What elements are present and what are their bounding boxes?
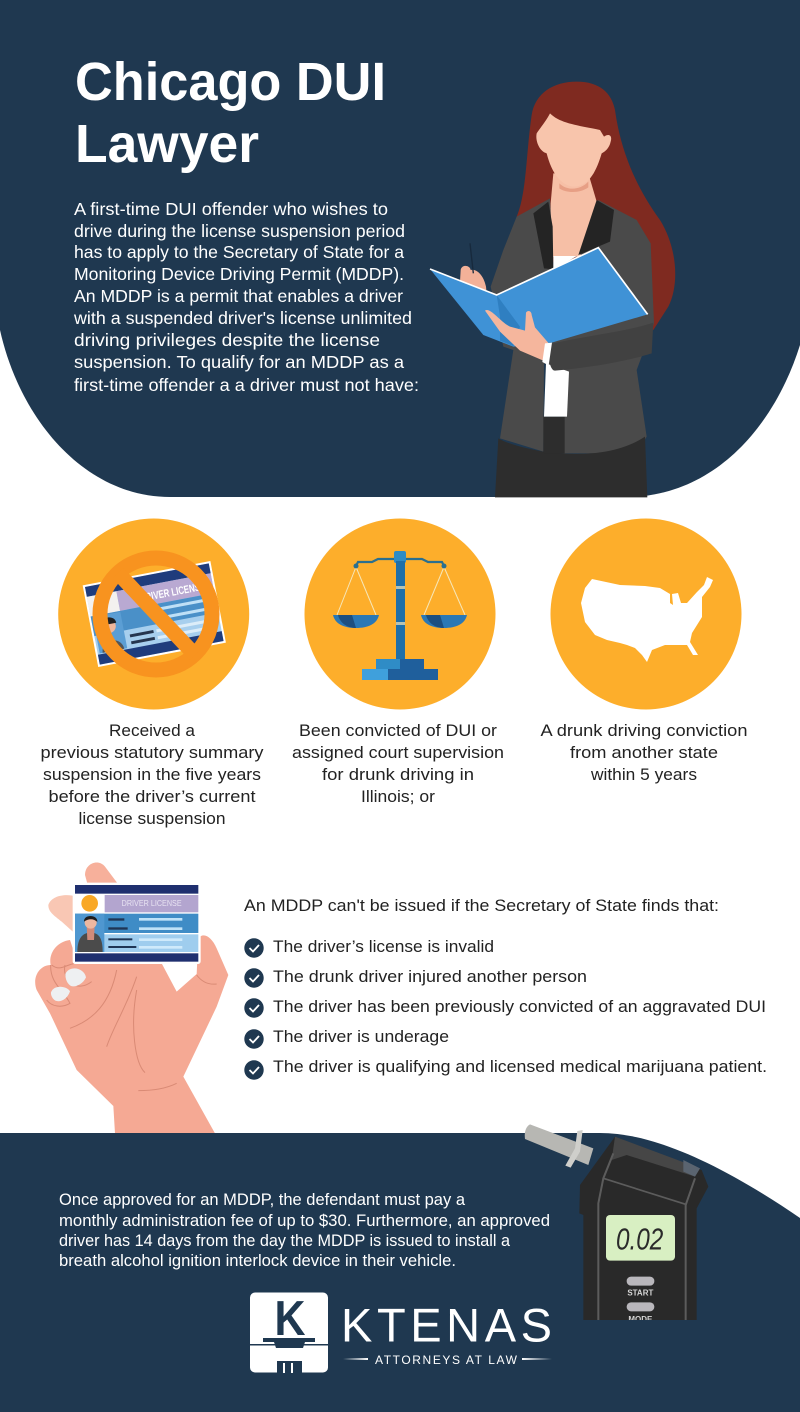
intro paragraph: has to apply to the Secretary of State for a [74,242,404,262]
caption: out-of-state conviction: A drunk driving conviction [540,722,748,740]
panel: three disqualifying conditions [40,518,748,828]
fee paragraph: Once approved for an MDDP, the defendant must pay a [59,1191,466,1209]
logo: Ktenas Attorneys at Law [250,1292,552,1373]
illustration: breathalyzer: MODE [628,1315,653,1324]
caption: previous suspension [40,722,264,828]
icon: scales of justice [304,518,496,710]
caption: previous suspension: license suspension [78,810,226,828]
intro paragraph: Monitoring Device Driving Permit (MDDP). [74,264,404,284]
illustration: woman with folder [430,82,675,497]
caption: previous suspension: Received a [109,722,196,740]
fee paragraph: driver has 14 days from the day the MDDP is issued to install a [59,1232,511,1250]
illustration: breathalyzer: START [627,1288,653,1297]
title: Lawyer [75,114,259,174]
list item: invalid license: The driver’s license is invalid [273,937,494,956]
logo wordmark: KTENAS [341,1298,552,1352]
title: Chicago DUI [75,52,386,112]
fee paragraph: monthly administration fee of up to $30. Furthermore, an approved [59,1212,550,1230]
caption: previous suspension: before the driver’s current [48,788,256,806]
caption: prior conviction: Been convicted of DUI or [299,722,498,740]
intro paragraph: with a suspended driver's license unlimited [73,308,412,328]
icon: map of the United States [550,518,742,710]
icon: prohibited driver license: DRIVER LICENSE [139,581,206,605]
caption: previous suspension: suspension in the five years [43,766,261,784]
illustration: hand holding driver license: DRIVER LICENSE [122,899,182,908]
intro paragraph: An MDDP is a permit that enables a driver [74,286,403,306]
icon: prohibited driver license [58,518,249,710]
text block: MDDP denial conditions [244,896,767,1080]
caption: prior conviction: for drunk driving in [322,766,474,784]
intro paragraph: driving privileges despite the license [74,330,380,350]
caption: prior conviction [292,722,504,806]
fee paragraph [59,1191,550,1270]
logo tagline: ATTORNEYS AT LAW [375,1353,518,1367]
illustration: hand holding driver license [35,863,228,1133]
list heading: An MDDP can't be issued if the Secretary of State finds that: [244,896,719,915]
list item: injured person: The drunk driver injured another person [273,967,587,986]
caption: prior conviction: assigned court supervision [292,744,504,762]
caption: out-of-state conviction [540,722,748,784]
logo icon: K [274,1292,306,1346]
panel: bottom fees and logo [0,1124,800,1412]
title [75,52,386,174]
logo icon [250,1292,328,1373]
illustration: breathalyzer [525,1124,708,1324]
intro paragraph: A first-time DUI offender who wishes to [74,199,388,219]
caption: prior conviction: Illinois; or [361,788,436,806]
illustration: breathalyzer: 0.02 [616,1222,663,1256]
list item: aggravated DUI: The driver has been previously convicted of an aggravated DUI [273,997,766,1016]
intro paragraph: drive during the license suspension period [74,221,405,241]
intro paragraph: suspension. To qualify for an MDDP as a [74,352,404,372]
caption: out-of-state conviction: within 5 years [590,766,697,784]
intro paragraph: first-time offender a a driver must not have: [74,375,419,395]
list item: medical marijuana: The driver is qualifying and licensed medical marijuana patient. [273,1057,767,1076]
caption: out-of-state conviction: from another state [570,744,718,762]
fee paragraph: breath alcohol ignition interlock device in their vehicle. [59,1252,456,1270]
caption: previous suspension: previous statutory summary [40,744,264,762]
panel: top intro [0,0,800,497]
intro paragraph [73,199,419,395]
list item: underage: The driver is underage [273,1027,449,1046]
